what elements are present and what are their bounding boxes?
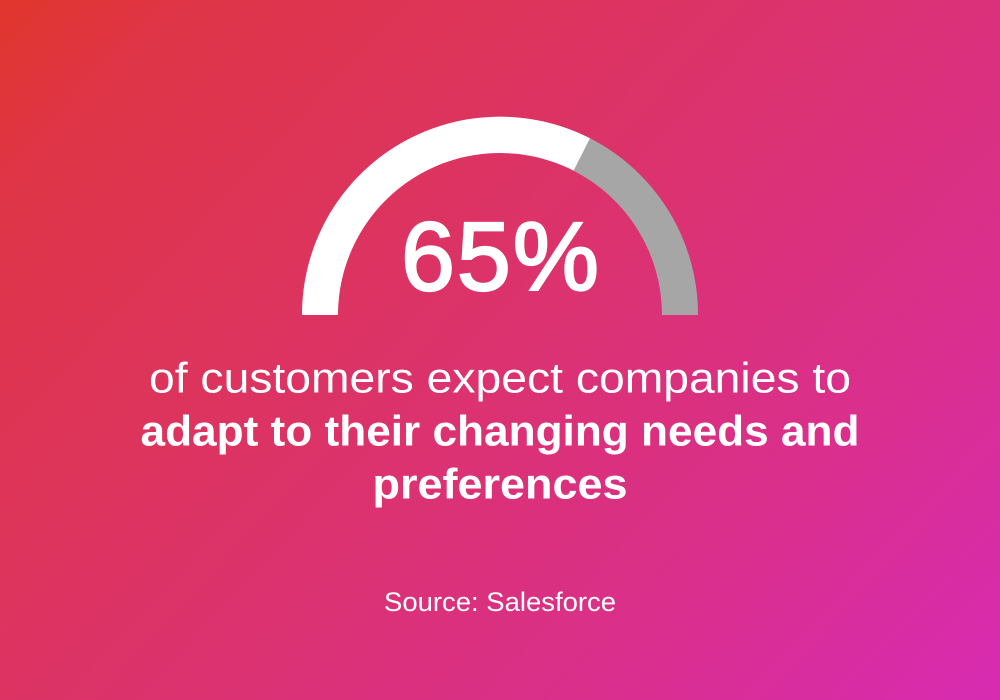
statement text	[140, 354, 859, 508]
gauge remainder segment	[574, 138, 698, 315]
semicircular gauge: 65 percent	[302, 117, 698, 315]
statement line 1: of customers expect companies to	[149, 354, 851, 402]
gauge filled segment	[302, 117, 590, 315]
statement line 3 bold: preferences	[372, 460, 628, 508]
big statistic: 65%	[401, 202, 599, 311]
statement line 2 bold: adapt to their changing needs and	[140, 408, 859, 456]
source note: Source: Salesforce	[384, 587, 616, 617]
